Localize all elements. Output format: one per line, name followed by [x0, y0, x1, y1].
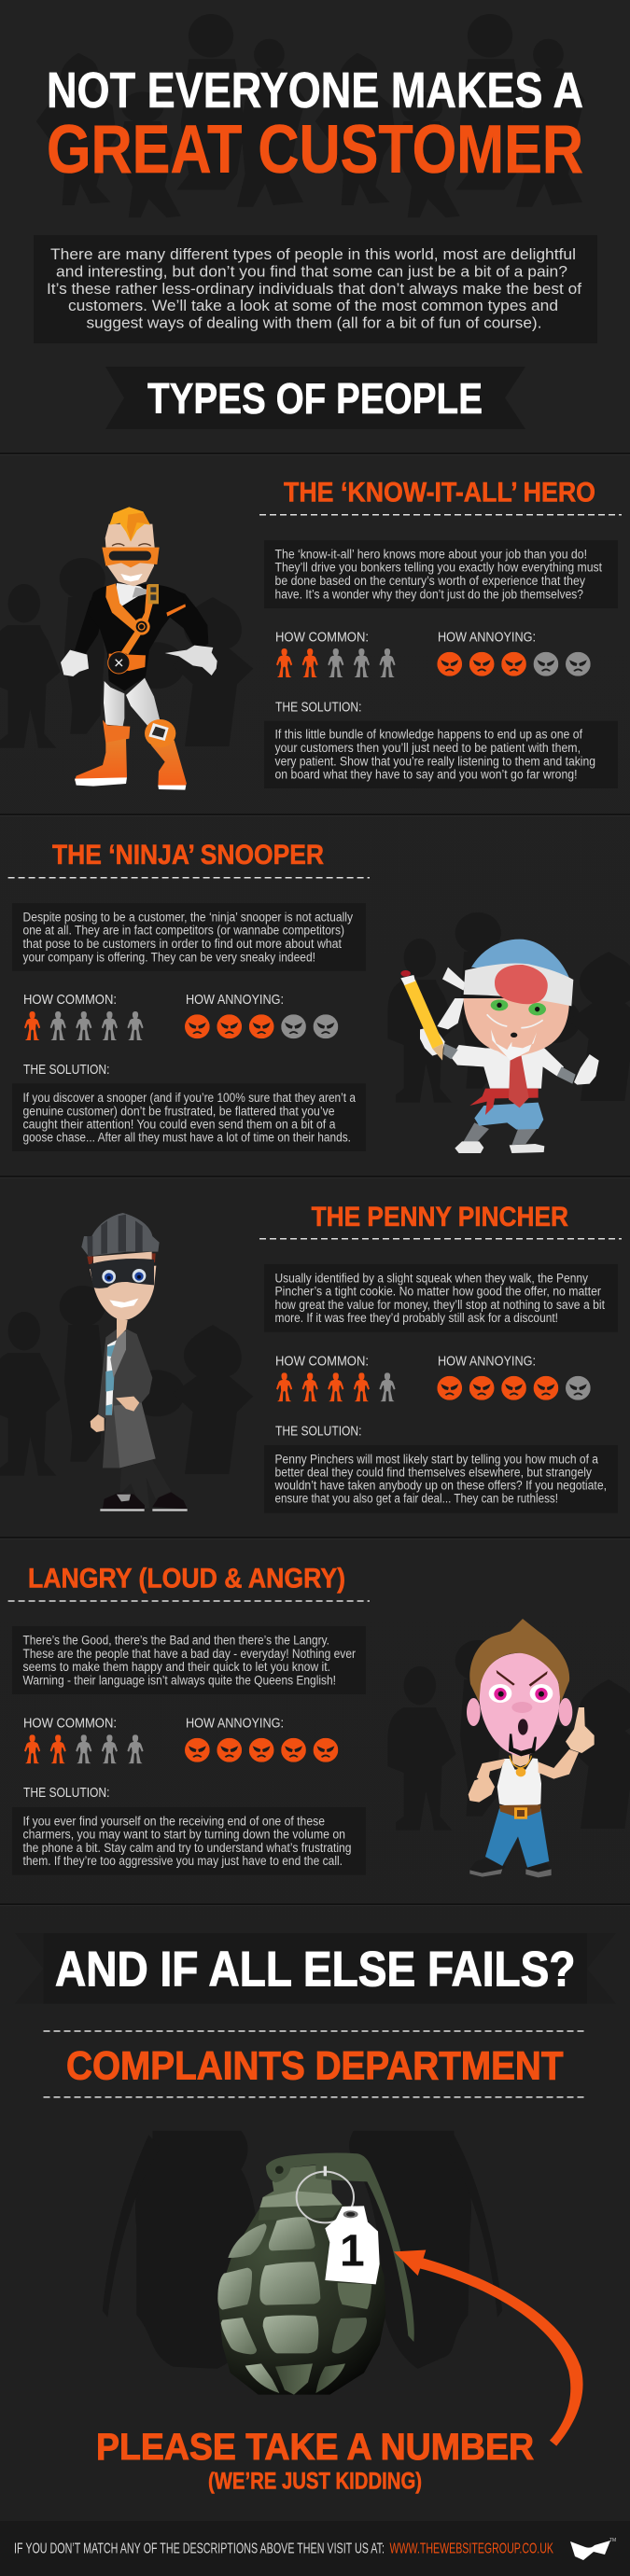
solution: them. If they’re too aggressive you may just have to end the call.	[22, 1854, 343, 1868]
footer: WWW.THEWEBSITEGROUP.CO.UK	[390, 2541, 553, 2556]
how common rating	[23, 1715, 144, 1763]
description: Despite posing to be a customer, the ‘ninja’ snooper is not actually	[22, 910, 353, 924]
heading: THE ‘NINJA’ SNOOPER	[52, 840, 324, 870]
solution: THE SOLUTION:	[23, 1785, 110, 1801]
heading: LANGRY (LOUD & ANGRY)	[28, 1564, 345, 1594]
panel: penny pincher	[0, 1202, 622, 1513]
how common rating: HOW COMMON:	[23, 992, 117, 1008]
description: your company is offering. They can be very sneaky indeed!	[22, 950, 315, 964]
description: be done based on the century’s worth of experience that they	[274, 574, 585, 588]
solution: If you ever find yourself on the receiving end of one of these	[22, 1815, 325, 1829]
panel: know-it-all hero	[0, 478, 622, 790]
solution	[12, 1785, 366, 1875]
footer: IF YOU DON’T MATCH ANY OF THE DESCRIPTIONS ABOVE THEN VISIT US AT:	[14, 2541, 385, 2556]
solution: goose chase... After all they must have a lot of time on their hands.	[22, 1131, 351, 1145]
call to action: PLEASE TAKE A NUMBER	[96, 2427, 534, 2468]
intro text panel: It’s these rather less-ordinary individuals that don’t always make the best of	[47, 281, 581, 298]
heading ribbon: types of people: TYPES OF PEOPLE	[147, 374, 483, 423]
heading ribbon: types of people	[105, 367, 525, 429]
how annoying rating: HOW ANNOYING:	[186, 992, 284, 1008]
description: They’ll drive you bonkers telling you exactly how everything must	[274, 561, 602, 575]
logo	[570, 2538, 616, 2560]
solution: THE SOLUTION:	[275, 699, 362, 715]
intro text panel: suggest ways of dealing with them (all for a bit of fun of course).	[86, 315, 541, 332]
intro text panel: customers. We’ll take a look at some of the most common types and	[68, 298, 558, 314]
description: that pose to be customers in order to find out more about what	[22, 937, 342, 951]
description: have. It’s a wonder why they don’t just do the job themselves?	[274, 587, 583, 601]
number tag: 1	[340, 2226, 365, 2276]
solution: ensure that you also get a fair deal... They can be ruthless!	[274, 1492, 558, 1506]
description: Warning - their language isn’t always quite the Queens English!	[22, 1673, 336, 1687]
how annoying rating	[185, 1715, 338, 1762]
description: There’s the Good, there’s the Bad and then there’s the Langry.	[22, 1634, 329, 1648]
panel: langry	[8, 1564, 630, 1877]
solution: THE SOLUTION:	[275, 1423, 362, 1439]
solution: If this little bundle of knowledge happens to end up as one of	[274, 728, 582, 742]
call to action: (WE’RE JUST KIDDING)	[208, 2469, 422, 2495]
panel: ninja snooper	[8, 840, 630, 1153]
character: hero	[61, 507, 217, 790]
description	[12, 1626, 366, 1694]
solution	[12, 1062, 366, 1151]
header silhouettes	[36, 14, 584, 217]
solution	[264, 699, 618, 788]
intro text panel: and interesting, but don’t you find that some can just be a bit of a pain?	[56, 264, 567, 281]
description: Usually identified by a slight squeak when they walk, the Penny	[274, 1271, 588, 1285]
how annoying rating	[437, 1353, 591, 1400]
description: The ‘know-it-all’ hero knows more about your job than you do!	[274, 547, 587, 561]
how common rating: HOW COMMON:	[275, 629, 369, 645]
solution: charmers, you may want to start by turning down the volume on	[22, 1828, 345, 1842]
description: how great the value for money, they’ll stop at nothing to save a bit	[274, 1298, 605, 1312]
grenade illustration	[217, 2153, 414, 2395]
heading: complaints department: COMPLAINTS DEPARTMENT	[66, 2043, 564, 2088]
solution: very patient. Show that you’re really listening to them and taking	[274, 754, 595, 768]
grenade body	[217, 2153, 414, 2395]
solution: Penny Pinchers will most likely start by telling you how much of a	[274, 1452, 598, 1466]
intro text panel	[34, 235, 597, 343]
heading: THE PENNY PINCHER	[312, 1202, 568, 1232]
description: one at all. They are in fact competitors (or wannabe competitors)	[22, 924, 344, 938]
solution: better deal they could find themselves elsewhere, but strangely	[274, 1466, 592, 1480]
grenade shadows	[103, 2131, 502, 2369]
description	[12, 903, 366, 971]
solution: THE SOLUTION:	[23, 1062, 110, 1078]
intro text panel: There are many different types of people in this world, most are delightful	[50, 246, 576, 263]
logo: TM	[609, 2538, 616, 2543]
description	[264, 540, 618, 608]
how common rating	[275, 1353, 396, 1401]
character: thief	[81, 1213, 188, 1511]
description	[264, 1264, 618, 1332]
description: Pincher’s a tight cookie. No matter how good the offer, no matter	[274, 1285, 601, 1299]
how annoying rating: HOW ANNOYING:	[186, 1715, 284, 1731]
footer	[0, 2521, 630, 2576]
arrow	[394, 2250, 583, 2446]
solution: genuine customer) don’t be frustrated, be flattered that you’ve	[22, 1104, 334, 1118]
solution: caught their attention! You could even send them on a bit of a	[22, 1117, 336, 1131]
character: ninja	[400, 940, 599, 1153]
solution	[264, 1423, 618, 1513]
how annoying rating: HOW ANNOYING:	[438, 629, 536, 645]
solution: the phone a bit. Stay calm and try to understand what’s frustrating	[22, 1841, 351, 1855]
call to action	[96, 2427, 534, 2495]
character: angry man	[467, 1619, 595, 1877]
how common rating	[275, 629, 396, 677]
number tag	[297, 2166, 380, 2284]
solution: your customers then you’ll just need to be patient with them,	[274, 741, 581, 755]
description: These are the people that have a bad day - everyday! Nothing ever	[22, 1647, 356, 1661]
solution: on board what they have to say and you won’t go far wrong!	[274, 768, 577, 782]
how annoying rating	[185, 992, 338, 1038]
title	[47, 63, 583, 188]
how common rating	[23, 992, 144, 1040]
description: seems to make them happy and their quick to let you know it.	[22, 1660, 330, 1674]
how common rating: HOW COMMON:	[275, 1353, 369, 1369]
how annoying rating	[437, 629, 591, 676]
solution: If you discover a snooper (and if you’re 100% sure that they aren’t a	[22, 1091, 356, 1105]
heading: THE ‘KNOW-IT-ALL’ HERO	[284, 478, 595, 508]
how annoying rating: HOW ANNOYING:	[438, 1353, 536, 1369]
how common rating: HOW COMMON:	[23, 1715, 117, 1731]
description: more. If it was free they’d probably still ask for a discount!	[274, 1311, 558, 1325]
